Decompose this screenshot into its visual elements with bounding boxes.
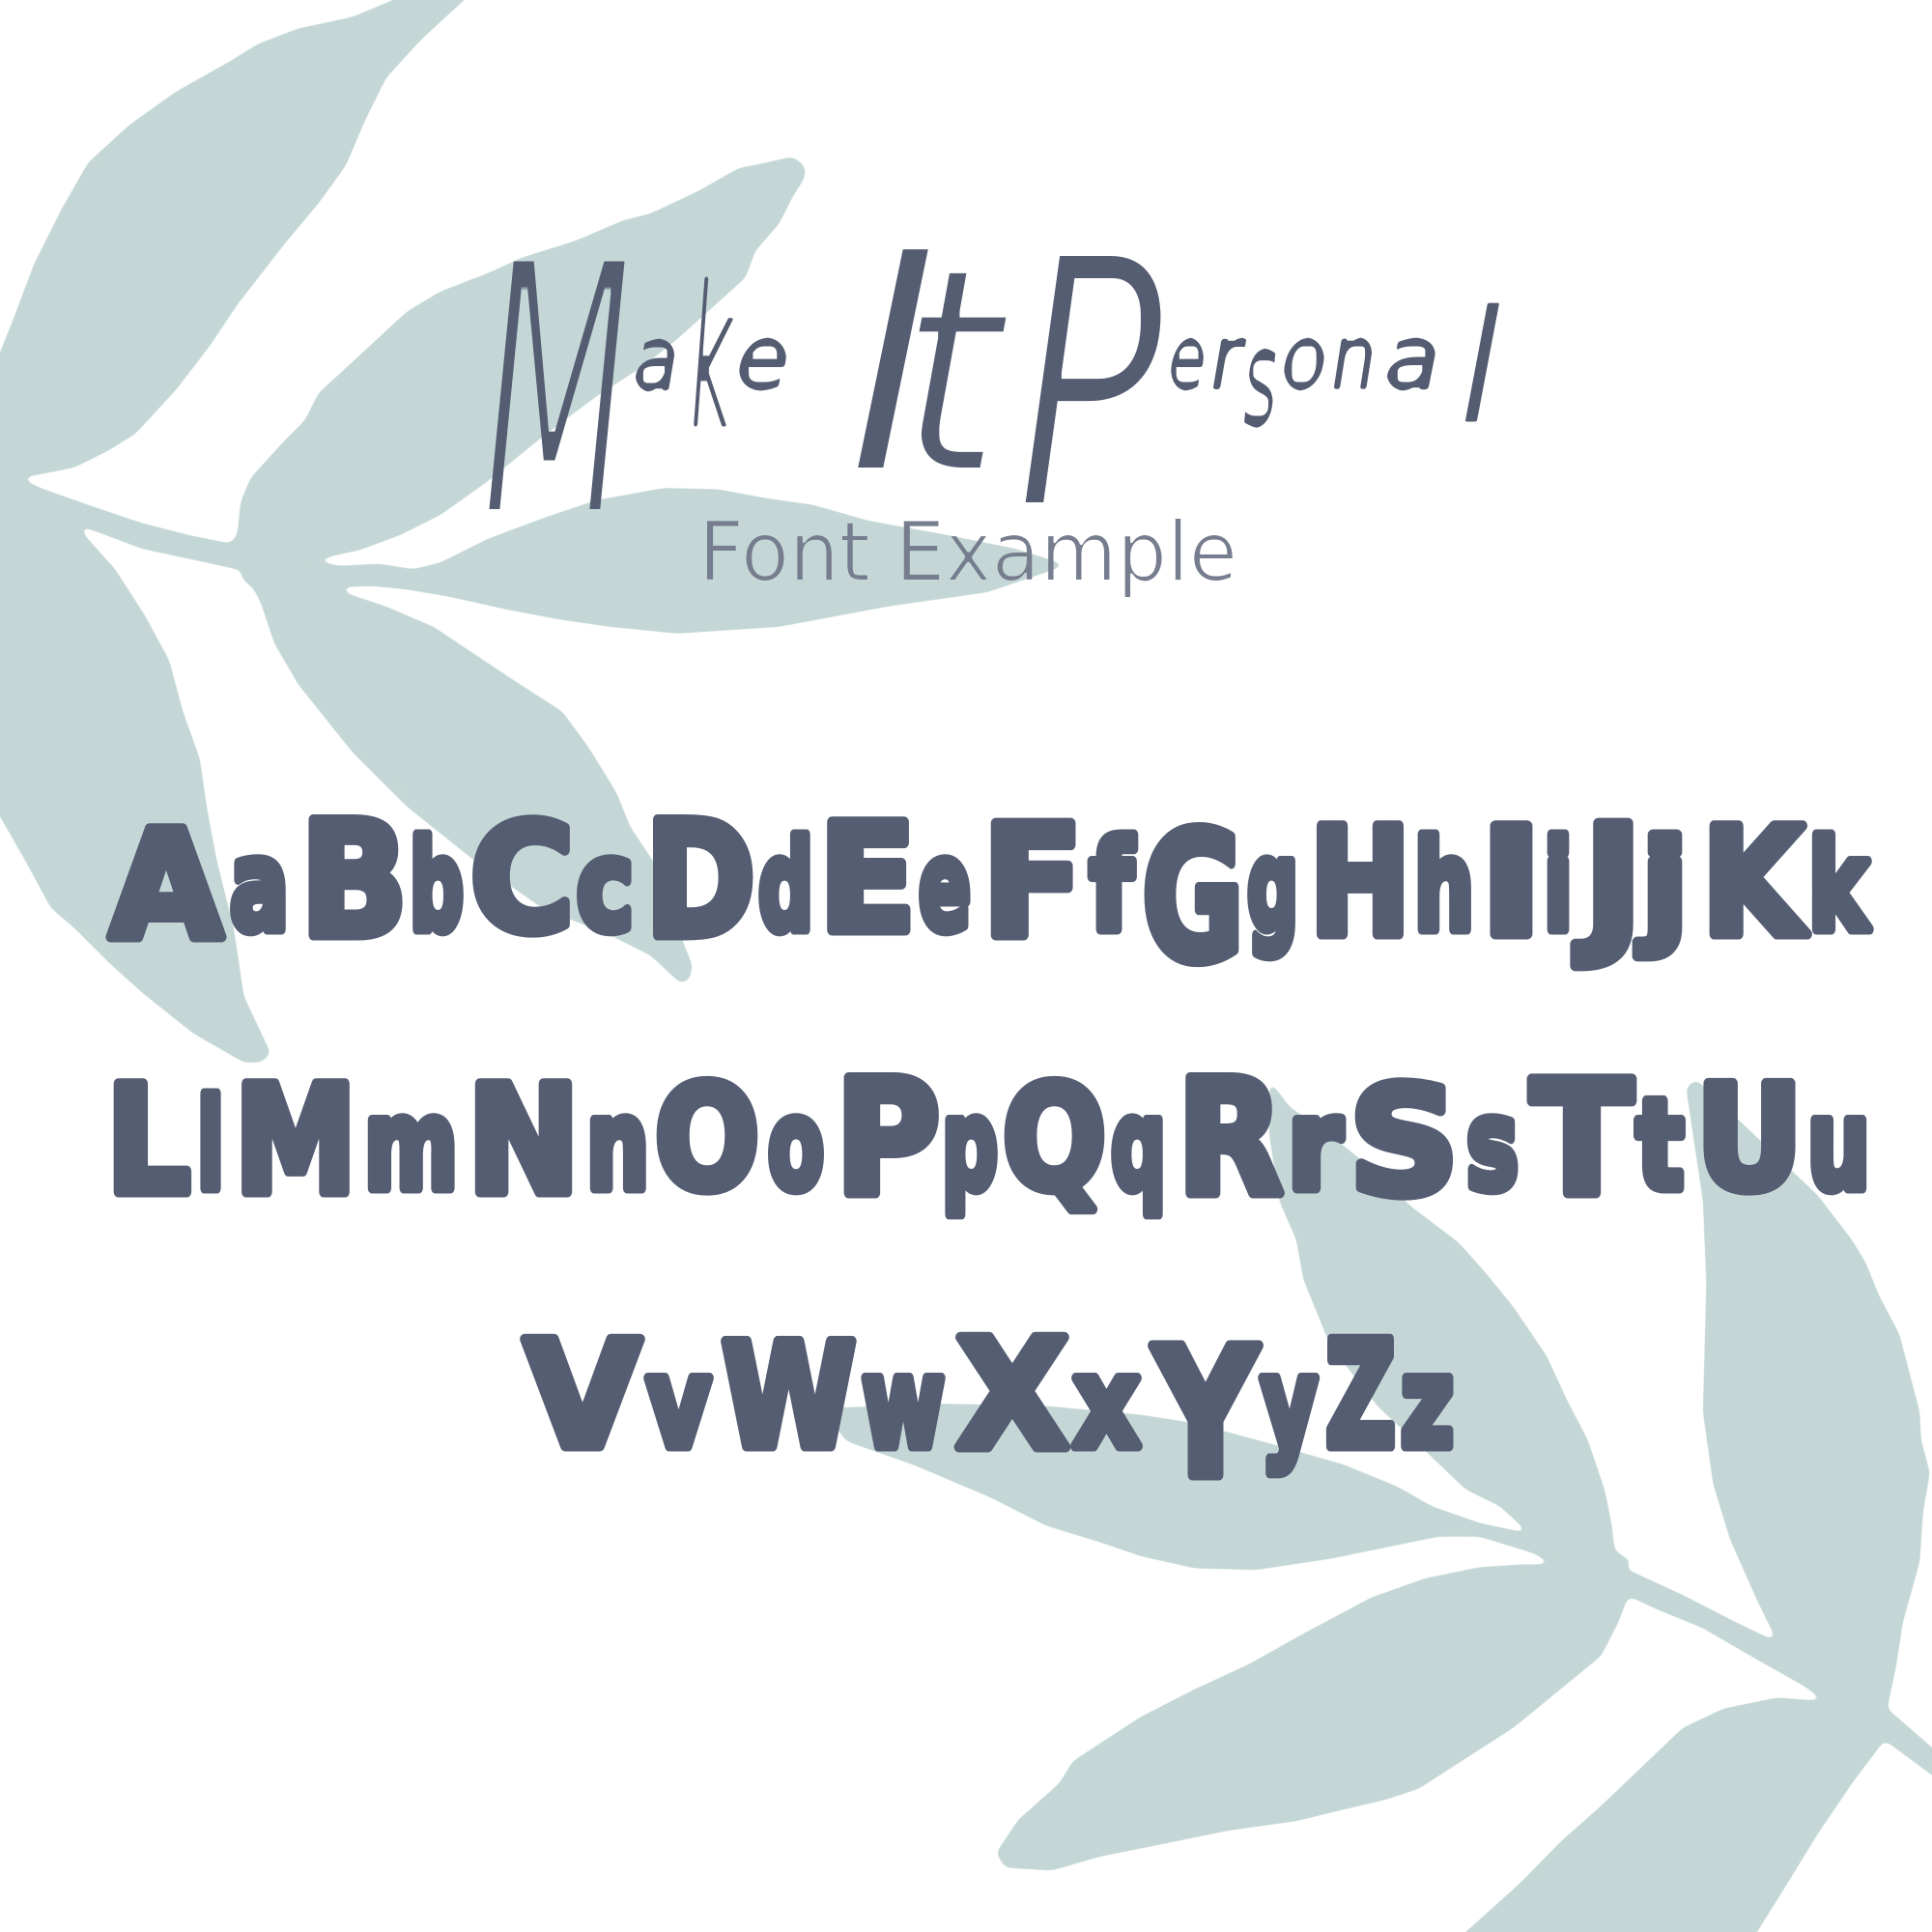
alphabet row 1: A to K: B [300, 788, 408, 973]
alphabet row 3: V to Z: y [1261, 1331, 1318, 1476]
alphabet row 2: L to U: L [106, 1055, 190, 1228]
title: Make It Personal: n [1331, 306, 1377, 410]
alphabet row 1: A to K: J [1576, 793, 1642, 972]
alphabet row 2: L to U: n [586, 1073, 649, 1218]
alphabet row 1: A to K: a [230, 814, 289, 959]
alphabet row 2: L to U: l [197, 1073, 224, 1218]
alphabet row 3: V to Z: W [722, 1314, 856, 1481]
alphabet row 2: L to U: Q [1003, 1056, 1106, 1223]
alphabet row 2: L to U: s [1466, 1073, 1519, 1218]
alphabet row 2: L to U: o [768, 1073, 824, 1218]
alphabet row 1: A to K: I [1481, 797, 1542, 970]
alphabet row 1: A to K: i [1544, 814, 1573, 959]
alphabet row 1: A to K: C [470, 793, 574, 966]
title: Make It Personal: k [690, 246, 735, 471]
alphabet row 2: L to U: q [1111, 1073, 1166, 1218]
alphabet row 1: A to K: b [410, 814, 464, 959]
alphabet row 1: A to K: D [645, 788, 755, 973]
subtitle: Font Example: Font Example [698, 504, 1237, 601]
title: Make It Personal: t [898, 206, 1013, 538]
alphabet row 2: L to U: M [235, 1055, 356, 1228]
title: Make It Personal: M [481, 189, 633, 594]
alphabet row 3: V to Z: V [525, 1310, 640, 1481]
alphabet row 1: A to K: H [1310, 797, 1410, 970]
alphabet row 2: L to U: T [1531, 1049, 1633, 1231]
alphabet row 3: V to Z: v [646, 1331, 711, 1476]
title: Make It Personal: e [736, 306, 789, 410]
alphabet row 2: L to U: p [942, 1073, 998, 1218]
title: Make It Personal: s [1242, 300, 1278, 458]
alphabet row 1: A to K: j [1637, 814, 1688, 959]
alphabet row 3: V to Z: w [862, 1331, 945, 1476]
title: Make It Personal: r [1210, 306, 1247, 410]
alphabet row 1: A to K: G [1142, 795, 1244, 1002]
alphabet row 2: L to U: O [655, 1056, 759, 1223]
alphabet row 1: A to K: F [982, 793, 1083, 972]
alphabet row 3: V to Z: Y [1151, 1311, 1260, 1518]
title: Make It Personal: a [1384, 306, 1440, 410]
alphabet row 1: A to K: d [758, 814, 813, 959]
alphabet row 1: A to K: g [1247, 814, 1298, 959]
alphabet row 1: A to K: c [577, 814, 634, 959]
alphabet row 3: V to Z: x [1073, 1331, 1140, 1476]
title: Make It Personal: l [1459, 277, 1501, 460]
leaf illustration: bottom right [822, 1079, 1932, 1932]
leaf illustration: top left [0, 0, 1067, 1063]
alphabet row 1: A to K: E [819, 793, 916, 966]
title: Make It Personal: e [1168, 306, 1207, 410]
alphabet row 3: V to Z: X [956, 1307, 1068, 1483]
alphabet row 1: A to K: h [1414, 814, 1474, 959]
alphabet row 2: L to U: u [1807, 1073, 1870, 1218]
alphabet row 2: L to U: m [364, 1073, 458, 1218]
title: Make It Personal: o [1281, 306, 1327, 410]
alphabet row 1: A to K: f [1090, 814, 1135, 959]
alphabet row 2: L to U: P [836, 1046, 940, 1231]
title: Make It Personal: I [845, 185, 941, 543]
alphabet row 2: L to U: S [1350, 1056, 1459, 1229]
alphabet row 2: L to U: N [468, 1055, 580, 1228]
alphabet row 1: A to K: e [919, 814, 971, 959]
title: Make It Personal: P [1015, 185, 1166, 587]
alphabet row 1: A to K: k [1808, 814, 1870, 959]
alphabet row 2: L to U: U [1696, 1056, 1803, 1223]
alphabet row 2: L to U: t [1636, 1073, 1684, 1218]
alphabet row 3: V to Z: z [1401, 1331, 1454, 1476]
alphabet row 3: V to Z: Z [1325, 1310, 1396, 1481]
alphabet row 1: A to K: K [1702, 797, 1807, 970]
title: Make It Personal: a [633, 307, 679, 411]
alphabet row 2: L to U: R [1178, 1046, 1283, 1231]
alphabet row 2: L to U: r [1288, 1073, 1342, 1218]
alphabet row 1: A to K: A [110, 800, 222, 973]
